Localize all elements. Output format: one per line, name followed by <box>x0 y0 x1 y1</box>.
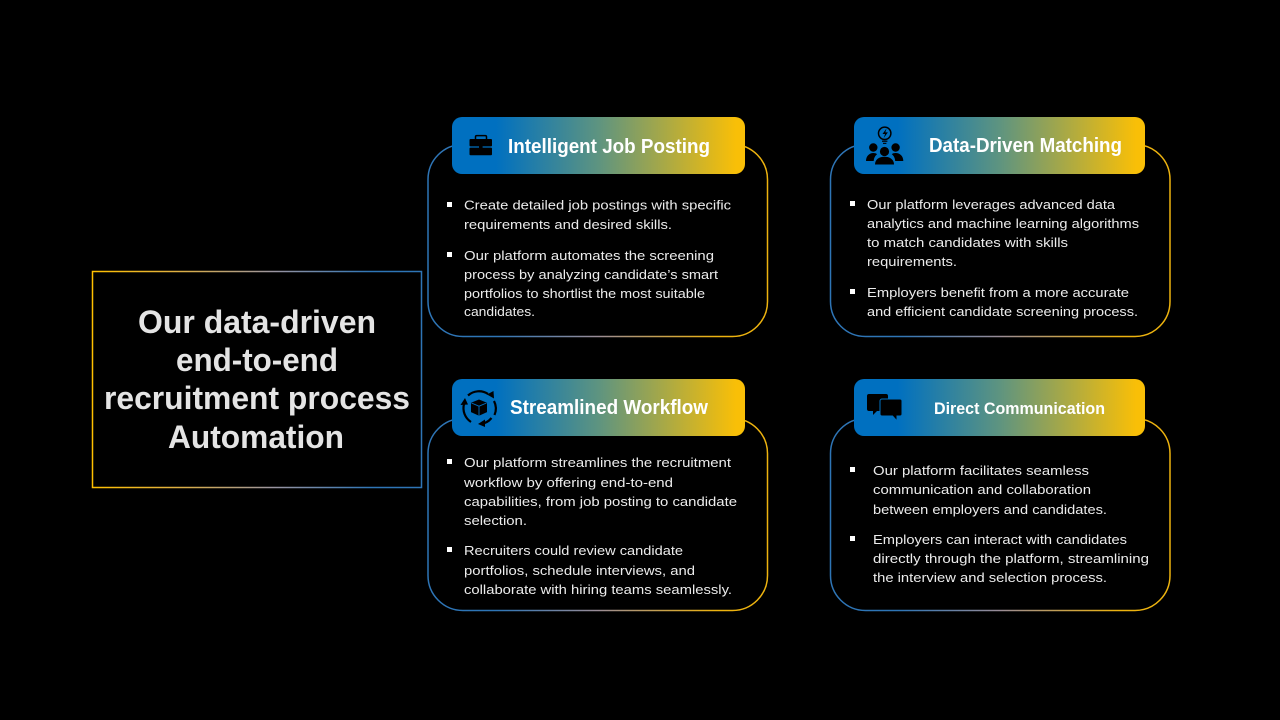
bullet: recruiter collaboration: portfolios, schedule interviews, and <box>464 563 695 578</box>
heading: Intelligent Job Posting: Intelligent Job Posting <box>508 136 710 158</box>
bullet: automated screening: process by analyzing candidate’s smart <box>464 267 718 282</box>
header: Intelligent Job Posting <box>452 117 745 174</box>
title: Our data-driven <box>138 304 376 340</box>
bullet: end-to-end workflow: selection. <box>464 513 527 528</box>
header: Data-Driven Matching <box>854 117 1145 174</box>
icon: team with light bulb <box>866 127 903 164</box>
bullet: accurate screening <box>850 285 1138 319</box>
title: end-to-end <box>176 342 338 378</box>
bullet: detailed job postings: Create detailed job postings with specific <box>464 198 732 212</box>
panel: Direct Communication <box>830 379 1170 610</box>
bullet: advanced analytics: to match candidates with skills <box>867 235 1069 250</box>
bullet: end-to-end workflow <box>447 455 737 528</box>
title: Automation <box>168 419 344 455</box>
heading: Direct Communication: Direct Communication <box>934 400 1105 418</box>
bullet: automated screening: Our platform automates the screening <box>464 248 714 263</box>
bullet: accurate screening: and efficient candidate screening process. <box>867 304 1138 319</box>
header: Streamlined Workflow <box>452 379 745 436</box>
bullet: direct interaction: directly through the platform, streamlining <box>873 551 1149 566</box>
bullet: recruiter collaboration: collaborate with hiring teams seamlessly. <box>464 582 732 597</box>
panel: Intelligent Job Posting <box>428 117 768 336</box>
bullet: automated screening <box>447 248 718 319</box>
icon: speech bubbles <box>867 394 902 421</box>
header: Direct Communication <box>854 379 1145 436</box>
bullet: seamless communication: Our platform facilitates seamless <box>873 463 1090 478</box>
bullet: automated screening: candidates. <box>464 304 535 319</box>
heading: Data-Driven Matching: Data-Driven Matching <box>929 135 1122 157</box>
bullet: seamless communication: communication and collaboration <box>873 482 1091 497</box>
bullet: detailed job postings <box>447 198 732 232</box>
bullet: advanced analytics: Our platform leverages advanced data <box>867 197 1116 212</box>
bullet: accurate screening: Employers benefit from a more accurate <box>867 285 1129 300</box>
bullet: seamless communication: between employers and candidates. <box>873 502 1107 517</box>
bullet: end-to-end workflow: capabilities, from job posting to candidate <box>464 494 737 509</box>
bullet: advanced analytics: requirements. <box>867 254 957 269</box>
bullet: seamless communication <box>850 463 1107 517</box>
bullet: recruiter collaboration <box>447 543 732 597</box>
panel: Data-Driven Matching <box>830 117 1170 336</box>
title: recruitment process <box>104 380 410 416</box>
icon: briefcase <box>470 136 492 155</box>
bullet: direct interaction: the interview and selection process. <box>873 570 1107 585</box>
bullet: automated screening: portfolios to shortlist the most suitable <box>464 286 705 301</box>
bullet: direct interaction: Employers can interact with candidates <box>873 532 1128 547</box>
bullet: recruiter collaboration: Recruiters could review candidate <box>464 543 683 558</box>
title <box>104 304 410 455</box>
icon: box with cycle arrows <box>460 391 496 427</box>
bullet: detailed job postings: requirements and desired skills. <box>464 217 672 232</box>
bullet: advanced analytics: analytics and machine learning algorithms <box>867 216 1140 231</box>
panel: title box <box>92 272 422 488</box>
bullet: end-to-end workflow: workflow by offering end-to-end <box>463 475 673 490</box>
bullet: advanced analytics <box>850 197 1140 269</box>
panel: Streamlined Workflow <box>428 379 768 610</box>
bullet: end-to-end workflow: Our platform streamlines the recruitment <box>464 455 731 470</box>
heading: Streamlined Workflow: Streamlined Workflow <box>510 397 708 419</box>
bullet: direct interaction <box>850 532 1149 585</box>
